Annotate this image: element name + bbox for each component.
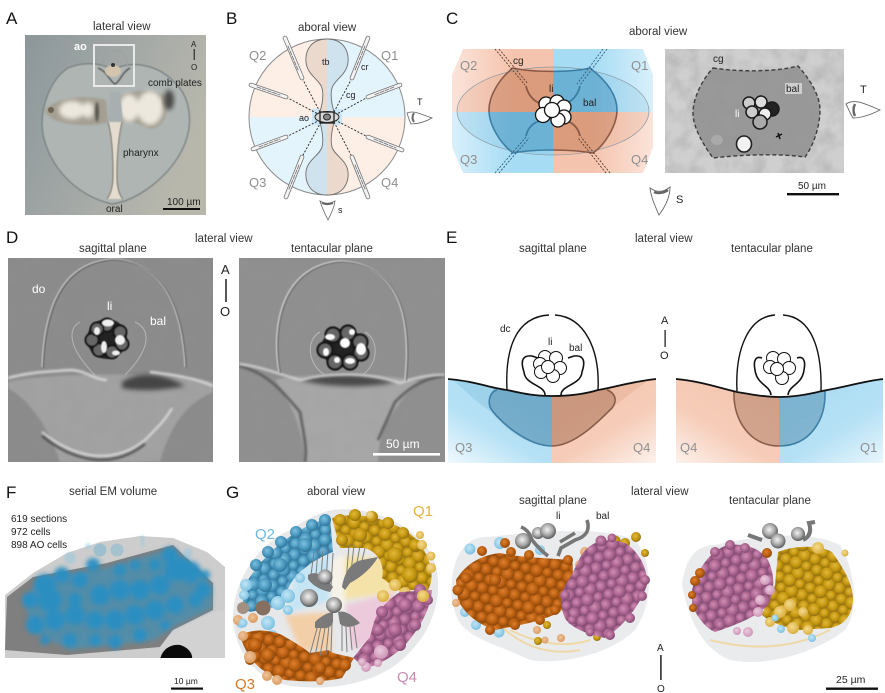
- label ao: ao: [74, 41, 87, 53]
- dome: [737, 315, 821, 391]
- scale 50 µm: [373, 437, 440, 456]
- quadrant labels: Q3: [235, 676, 255, 693]
- subheading sagittal plane: sagittal plane: [519, 495, 587, 507]
- translucent body: [451, 531, 649, 661]
- inner pale wash: [285, 555, 395, 652]
- labels cg li bal: li: [549, 84, 553, 95]
- scale 50 µm: 50 µm: [386, 437, 420, 451]
- quadrant labels: [249, 48, 398, 190]
- 3D sagittal reconstruction: [451, 520, 650, 661]
- mauve spheres: [560, 534, 650, 640]
- ciliated groove dotted lines cg: [286, 78, 368, 157]
- subheading tentacular plane: tentacular plane: [291, 243, 373, 255]
- aboral organ ao: [315, 112, 339, 123]
- micrograph labels: cg: [713, 54, 724, 65]
- quadrant labels: Q4: [633, 440, 650, 455]
- labels do li bal: bal: [150, 314, 166, 328]
- quadrant labels: [680, 440, 877, 455]
- scale 100 µm: 100 µm: [167, 197, 201, 208]
- thread detail: [710, 630, 830, 647]
- micrograph labels: bal: [786, 84, 799, 95]
- panel letter A: A: [6, 9, 18, 28]
- micrograph aboral detail: [665, 49, 844, 173]
- icon: eye T: [846, 84, 880, 118]
- icon: eye S: S: [676, 194, 683, 206]
- quadrant labels: Q3: [249, 175, 266, 190]
- heading: aboral view: aboral view: [307, 486, 366, 498]
- quadrant labels: Q1: [631, 58, 648, 73]
- quadrant labels: Q3: [460, 152, 477, 167]
- ellipse outline: [457, 67, 649, 155]
- labels cg li bal: bal: [583, 98, 596, 109]
- panel letter G: G: [226, 483, 239, 502]
- labels do li bal: do: [32, 282, 46, 296]
- bowl outline: [489, 390, 615, 446]
- photo of whole animal: [25, 35, 206, 215]
- blue spheres behind: [460, 537, 545, 638]
- quadrant labels: Q1: [381, 48, 398, 63]
- blue quadrant overlays: [457, 67, 649, 155]
- icon: eye T: T: [417, 97, 423, 107]
- lithocytes: [764, 352, 796, 384]
- scale 25 µm: [826, 674, 878, 690]
- labels dc li bal: [500, 324, 582, 354]
- heading: aboral view: aboral view: [298, 22, 357, 34]
- quadrant Q3 orange spheres: [233, 600, 354, 685]
- label comb plates: comb plates: [148, 78, 202, 89]
- section statistics: 898 AO cells: [11, 540, 67, 551]
- label li: li: [556, 511, 560, 522]
- quadrant labels: Q1: [860, 440, 877, 455]
- 3D aboral reconstruction: [233, 503, 438, 693]
- labels do li bal: [32, 282, 166, 328]
- label bal: bal: [596, 511, 609, 522]
- mauve spheres: [692, 540, 775, 637]
- quadrant labels: [460, 58, 648, 167]
- bowl outline: [734, 391, 825, 446]
- schematic tentacular: [676, 315, 883, 465]
- icon: eye T: T: [860, 84, 867, 96]
- gray balancer fans: [308, 557, 378, 628]
- quadrant labels: [235, 503, 433, 693]
- dome: [507, 315, 598, 390]
- icon: eye S: s: [338, 205, 343, 215]
- scale 50 µm: 50 µm: [798, 181, 826, 192]
- lithocyte cluster: [536, 95, 571, 127]
- section statistics: 619 sections: [11, 514, 67, 525]
- labels cg li bal: [513, 56, 596, 109]
- lithocyte spheres: [515, 523, 556, 549]
- labels dc li bal: bal: [569, 343, 582, 354]
- labels tb cr cg ao: tb: [322, 57, 330, 67]
- labels tb cr cg ao: cr: [361, 62, 368, 72]
- quadrant Q4 mauve spheres: [353, 584, 433, 672]
- subheading tentacular plane: tentacular plane: [731, 243, 813, 255]
- tentacle bulbs tb: [306, 39, 348, 195]
- quadrant Q2 blue spheres: [236, 514, 333, 642]
- quadrant labels: [455, 440, 650, 455]
- orange spheres: [688, 548, 772, 612]
- quadrant labels: Q1: [413, 503, 433, 520]
- heading: serial EM volume: serial EM volume: [69, 486, 157, 498]
- heading: lateral view: lateral view: [635, 233, 693, 245]
- orientation A-O: [660, 315, 669, 362]
- icon: eye S: [650, 187, 683, 215]
- balancer: [521, 520, 588, 556]
- panel letter C: C: [446, 9, 458, 28]
- icon: eye S: [320, 201, 343, 220]
- panel letter F: F: [6, 483, 16, 502]
- balancers: [754, 358, 805, 395]
- orientation A-O: A: [191, 40, 197, 49]
- orientation A-O: O: [191, 63, 197, 72]
- orientation A-O: O: [220, 304, 230, 319]
- quadrant Q1 gold spheres: [332, 509, 436, 608]
- quadrant labels: Q2: [460, 58, 477, 73]
- ao inset box: [94, 45, 134, 86]
- lithocyte spheres: [300, 570, 342, 613]
- orientation A-O: O: [660, 350, 669, 362]
- blue quadrant strokes: [489, 49, 617, 173]
- orientation A-O: A: [657, 643, 664, 654]
- quadrant labels: Q2: [255, 526, 275, 543]
- heading: lateral view: lateral view: [631, 486, 689, 498]
- heading: aboral view: aboral view: [629, 26, 688, 38]
- quadrant labels: Q3: [455, 440, 472, 455]
- scale 50 µm: [787, 181, 839, 195]
- subheading sagittal plane: sagittal plane: [79, 243, 147, 255]
- scale 10 µm: 10 µm: [174, 676, 198, 686]
- panel letter E: E: [446, 228, 457, 247]
- panel A: lateral view micrograph: [6, 9, 206, 215]
- lithocytes: [534, 350, 566, 382]
- gold spheres: [762, 542, 853, 642]
- quadrant labels: Q4: [381, 175, 398, 190]
- section statistics: [11, 514, 67, 551]
- gray fan filaments: [310, 545, 365, 656]
- faint cells above section: [64, 535, 193, 564]
- orientation A-O: [220, 262, 230, 319]
- labels dc li bal: dc: [500, 324, 511, 335]
- subheading sagittal plane: sagittal plane: [519, 243, 587, 255]
- micrograph labels: li: [735, 109, 739, 120]
- body surface line: [676, 379, 883, 397]
- orientation A-O: A: [221, 262, 230, 277]
- gold spheres behind right: [534, 532, 649, 645]
- panel D: lateral micrographs: [6, 228, 445, 462]
- section statistics: 972 cells: [11, 527, 50, 538]
- labels tb cr cg ao: cg: [346, 90, 356, 100]
- labels tb cr cg ao: ao: [299, 113, 309, 123]
- labels cg li bal: cg: [513, 56, 524, 67]
- labels tb cr cg ao: [299, 57, 368, 123]
- scale 10 µm: [171, 676, 203, 690]
- orientation A-O: A: [661, 315, 669, 327]
- panel F: serial EM volume: [5, 483, 225, 690]
- balancer: [748, 522, 815, 540]
- panel letter D: D: [6, 228, 18, 247]
- comb rows cr: [251, 38, 402, 197]
- quadrant labels: Q2: [249, 48, 266, 63]
- quadrant labels: Q4: [397, 669, 417, 686]
- 3D tentacular reconstruction: [682, 522, 854, 662]
- EM section with blue cell overlay: [5, 530, 225, 660]
- heading: lateral view: lateral view: [93, 21, 151, 33]
- micrograph sagittal: [8, 258, 213, 462]
- label pharynx: pharynx: [123, 148, 159, 159]
- icon: eye T: [407, 97, 432, 124]
- schematic with quadrants: [452, 49, 653, 173]
- subheading tentacular plane: tentacular plane: [729, 495, 811, 507]
- peach quadrant overlays: [457, 67, 649, 155]
- schematic sagittal: [448, 315, 656, 465]
- micrograph tentacular: [239, 258, 445, 462]
- labels dc li bal: li: [548, 337, 552, 348]
- balancers: [522, 356, 584, 395]
- panel letter B: B: [226, 9, 237, 28]
- heading: lateral view: lateral view: [195, 233, 253, 245]
- orientation A-O: [657, 643, 665, 693]
- panel G: 3D reconstructions: [226, 483, 878, 693]
- peach quadrant strokes: [489, 49, 617, 173]
- micrograph labels: [713, 54, 802, 120]
- circle with quadrants: [248, 38, 406, 196]
- translucent body: [233, 509, 438, 688]
- translucent body: [682, 536, 854, 662]
- panel C: aboral view detail: [446, 9, 880, 215]
- quadrant labels: Q4: [680, 440, 697, 455]
- thread detail: [500, 625, 590, 652]
- lithocyte spheres: [762, 523, 805, 548]
- panel E: lateral schematics: [446, 228, 883, 465]
- labels do li bal: li: [107, 299, 112, 313]
- label oral: oral: [106, 204, 123, 215]
- quadrant labels: Q4: [631, 152, 648, 167]
- orange spheres: [452, 538, 590, 644]
- body surface line: [448, 379, 656, 396]
- scale 25 µm: 25 µm: [836, 674, 866, 686]
- orientation A-O: [191, 40, 197, 72]
- panel B: aboral view schematic: [226, 9, 432, 220]
